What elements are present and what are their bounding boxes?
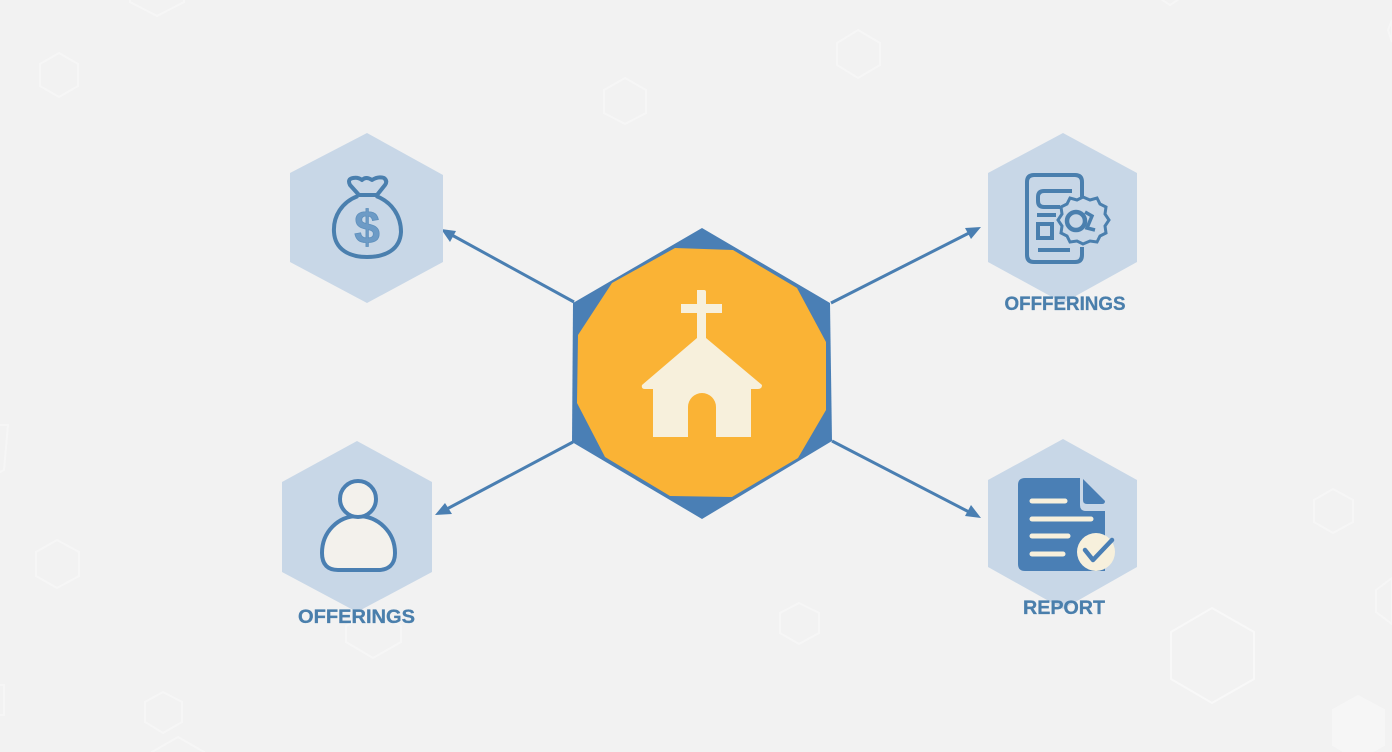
- icon: form with badge: [1027, 175, 1109, 262]
- icon: church: [642, 290, 762, 437]
- node: money bag: [290, 133, 443, 303]
- icon: money bag: [334, 177, 401, 257]
- label: offferings: OFFFERINGS: [1004, 294, 1126, 315]
- arrow: to money bag: [441, 229, 574, 302]
- node: report: [988, 439, 1137, 609]
- arrow: to report: [832, 441, 981, 518]
- icon: document with check: [1018, 478, 1115, 571]
- icon: dollar sign: $: [354, 201, 380, 253]
- arrow: to offerings form: [831, 227, 981, 303]
- node: offerings form: [988, 133, 1137, 303]
- label: report: REPORT: [1023, 598, 1105, 619]
- arrow: to person: [435, 442, 573, 515]
- label: offerings: OFFERINGS: [298, 607, 415, 628]
- icon: person: [322, 481, 395, 570]
- central church hexagon: [572, 228, 832, 519]
- node: person: [282, 441, 432, 612]
